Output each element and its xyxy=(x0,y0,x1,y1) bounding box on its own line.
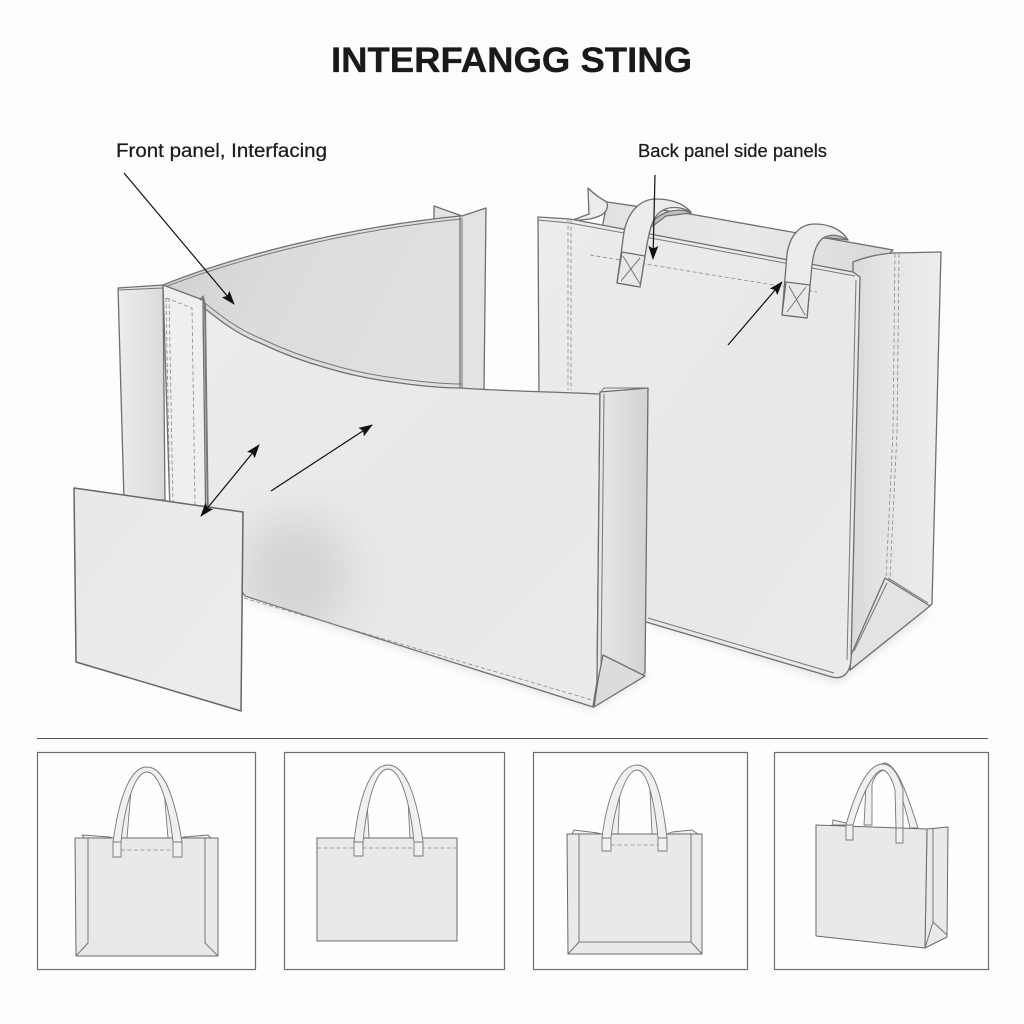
label: front panel, interfacing: Front panel, Interfacing xyxy=(116,140,327,162)
thumbnail 2: flat tote xyxy=(284,752,504,970)
handle: right xyxy=(782,224,848,318)
label: back panel side panels: Back panel side panels xyxy=(638,141,827,161)
title: INTERFANGG STING xyxy=(331,41,692,80)
arrow: to back panel xyxy=(124,173,234,304)
thumbnail 4: tote in perspective xyxy=(774,752,988,970)
arrow: double-headed interfacing to front panel xyxy=(201,445,259,516)
arrow: to back panel handle zone xyxy=(653,175,655,259)
left bag: front panel, curved back panel and side folds xyxy=(118,206,650,710)
right bag: assembled back panel with handles xyxy=(538,188,941,684)
thumbnail 1: tote with side gussets xyxy=(38,752,256,970)
thumbnail 3: tote with base fold xyxy=(534,752,748,970)
interfacing square xyxy=(74,488,243,711)
handle: left xyxy=(617,199,691,287)
arrow: to right handle xyxy=(728,282,782,345)
arrow: to front panel xyxy=(271,425,372,491)
soft shadow cast by interfacing square xyxy=(240,515,350,635)
divider xyxy=(37,738,988,740)
